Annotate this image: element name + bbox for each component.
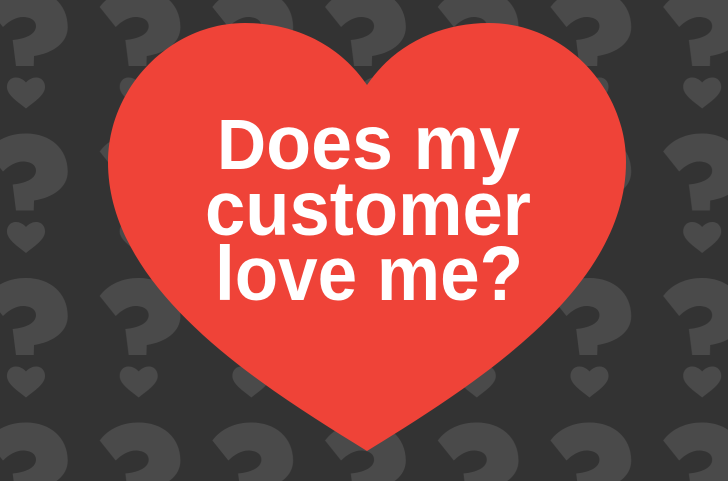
title: Does my customer love me? [205,100,531,317]
title: Does my customer love me?: love me? [215,231,523,317]
title: Does my customer love me?: customer [205,166,531,252]
title: Does my customer love me?: Does my [217,100,520,186]
large red heart [108,23,626,451]
